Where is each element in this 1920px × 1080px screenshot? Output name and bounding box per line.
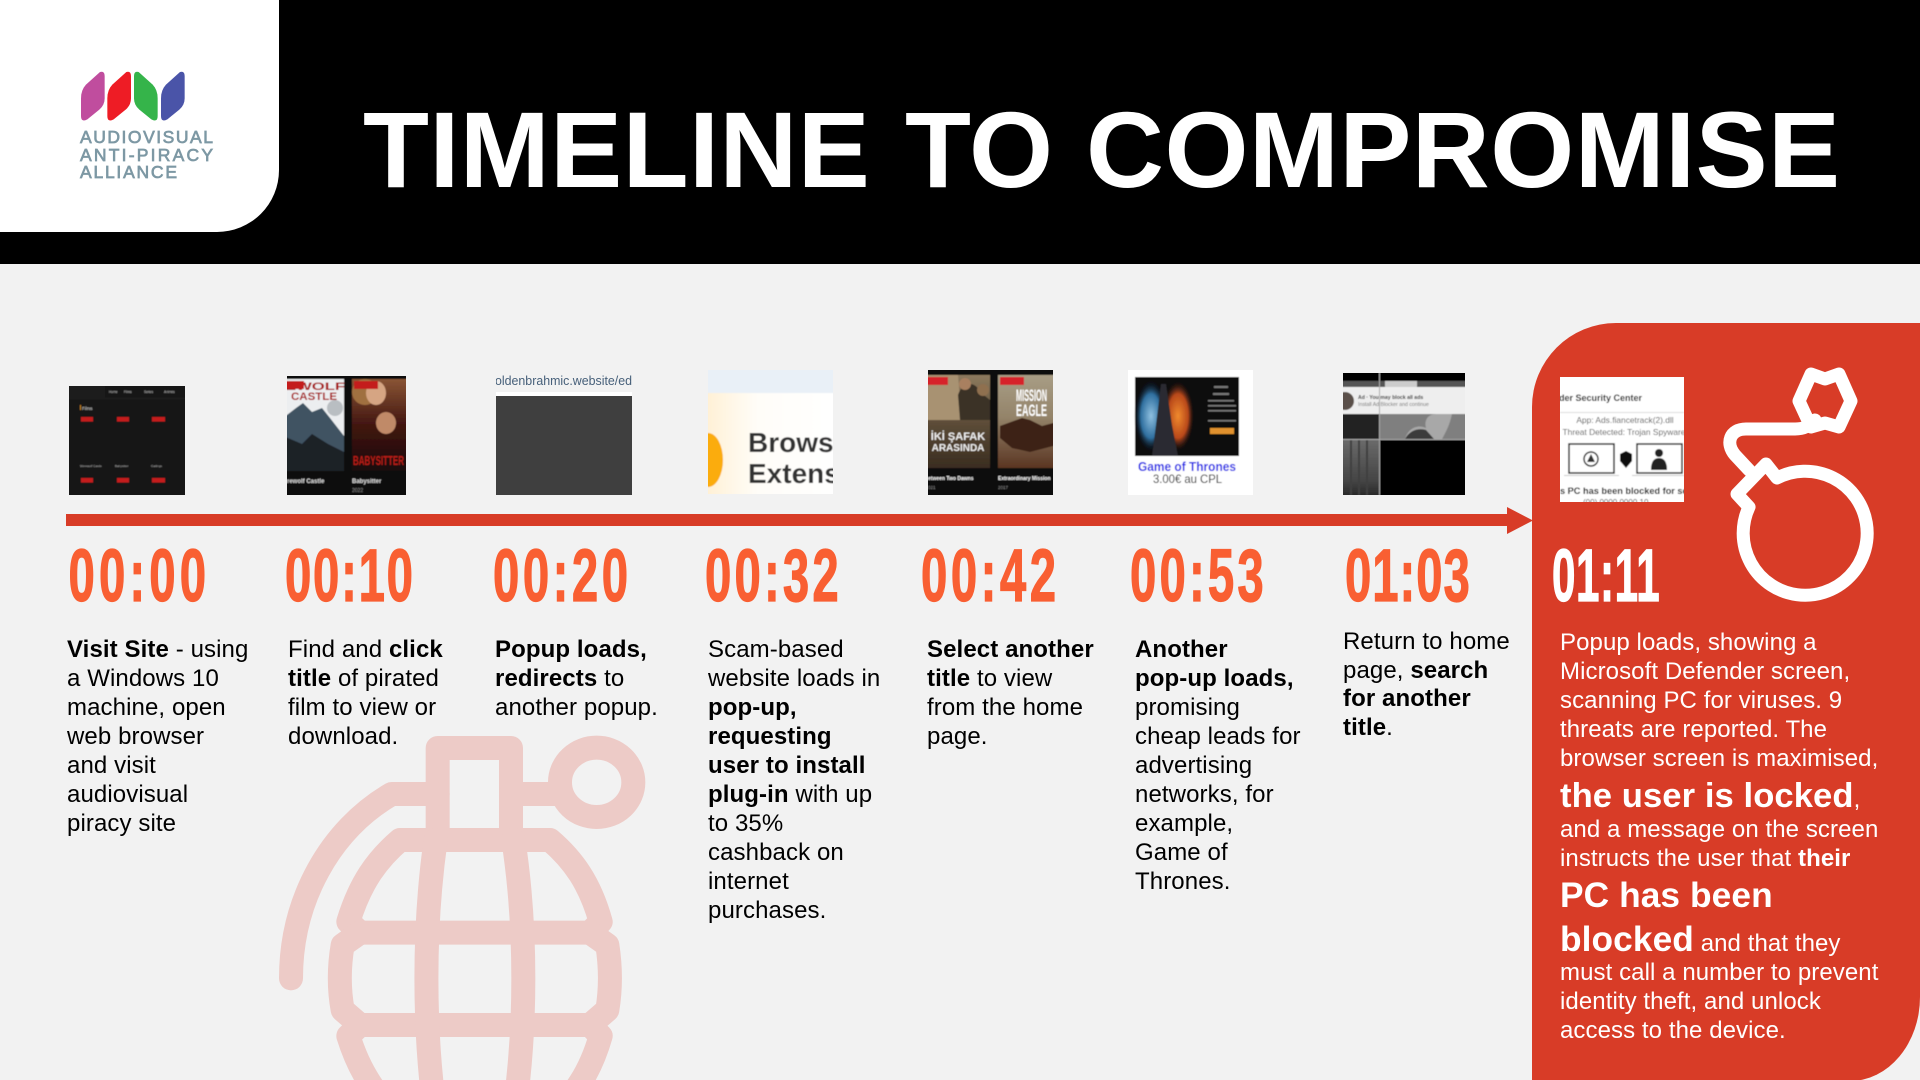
step 6 description: pop-up loads, <box>1135 665 1294 692</box>
logo wordmark: ANTI-PIRACY <box>80 145 213 165</box>
step 3 description: another popup. <box>495 694 658 721</box>
step 4 description: purchases. <box>708 897 826 924</box>
step 4 description: requesting <box>708 723 832 750</box>
step 3 description: redirects to <box>495 665 624 692</box>
logo wordmark: ALLIANCE <box>80 162 177 182</box>
step 5 description: page. <box>927 723 988 750</box>
step 8 <box>1552 374 1879 1044</box>
title: TIMELINE <box>363 89 870 210</box>
step 2 description: download. <box>288 723 398 750</box>
thumbnail 5: film posters: ARASINDA <box>932 443 984 454</box>
step 2 <box>285 535 443 750</box>
thumbnail 1: dark site listing: Home <box>109 390 118 394</box>
thumbnail 8: fake defender screen: Threat Detected: Trojan Spyware <box>1563 427 1686 437</box>
step 2 description: Find and click <box>288 636 443 663</box>
step 4 description: plug-in with up <box>708 781 872 808</box>
logo wordmark <box>80 127 213 182</box>
step 8 description: browser screen is maximised, <box>1560 745 1878 772</box>
time: 00:53: 00:53 <box>1130 535 1264 618</box>
step 1 description: and visit <box>67 752 156 779</box>
time: 00:42: 00:42 <box>921 535 1056 618</box>
thumbnail 1: dark site listing: Films <box>124 390 132 394</box>
thumbnail 4: browser extension page: Brows <box>748 427 834 458</box>
step 6 description: example, <box>1135 810 1233 837</box>
time: 01:11: 01:11 <box>1552 533 1660 617</box>
step 8 description: must call a number to prevent <box>1560 959 1879 986</box>
step 5 description: title to view <box>927 665 1052 692</box>
title: COMPROMISE <box>1086 89 1841 210</box>
step 6 description: cheap leads for <box>1135 723 1301 750</box>
step 6 description: promising <box>1135 694 1240 721</box>
thumbnail 1: dark site listing: Babysitter <box>115 464 128 468</box>
thumbnail 2: film posters: EWOLF <box>285 381 345 393</box>
step 7 <box>1343 535 1510 741</box>
time: 00:20: 00:20 <box>493 535 628 618</box>
step 1 description: web browser <box>66 723 204 750</box>
thumbnail 1: dark site listing: Films <box>82 406 93 411</box>
step 4 description: cashback on <box>708 839 844 866</box>
step 8 description: instructs the user that their <box>1560 845 1850 872</box>
icon: logo petals <box>81 72 185 120</box>
time: 00:00: 00:00 <box>68 535 206 618</box>
thumbnail 2: film posters: CASTLE <box>291 391 337 403</box>
time: 00:32: 00:32 <box>705 535 839 618</box>
step 1 description: piracy site <box>67 810 176 837</box>
step 4 description: pop-up, <box>708 694 797 721</box>
icon: grenade watermark <box>291 748 633 1080</box>
step 8 description: Microsoft Defender screen, <box>1560 658 1850 685</box>
thumbnail 2: film posters <box>285 376 406 495</box>
thumbnail 6: game of thrones ad <box>1128 370 1253 495</box>
step 3 <box>493 535 658 721</box>
step 7 description: . <box>1386 714 1393 741</box>
thumbnail 8: fake defender screen <box>1559 377 1688 507</box>
title: TO <box>905 89 1053 210</box>
step 3 description: Popup loads, <box>495 636 647 663</box>
thumbnail 4: browser extension page: Extens <box>748 458 840 489</box>
step 8 description: and a message on the screen <box>1560 816 1878 843</box>
step 5 description: Select another <box>927 636 1094 663</box>
step 7 description: page, search <box>1343 657 1488 684</box>
step 8 description: blocked and that they <box>1560 920 1841 959</box>
time: 00:10: 00:10 <box>285 535 413 618</box>
thumbnail 6: game of thrones ad: 3.00€ au CPL <box>1153 472 1222 486</box>
icon: bomb <box>1730 374 1867 595</box>
panel: final step background <box>1532 323 1920 1080</box>
thumbnail 4: browser extension page <box>708 370 840 494</box>
step 6 description: Game of <box>1135 839 1228 866</box>
step 6 description: Another <box>1135 636 1228 663</box>
thumbnail 2: film posters: Babysitter <box>352 479 382 485</box>
thumbnail 5: film posters: 021 <box>928 485 936 490</box>
thumbnail 6: game of thrones ad: Game of Thrones <box>1138 459 1236 474</box>
thumbnail 5: film posters: İKİ ŞAFAK <box>931 430 985 443</box>
thumbnail 8: fake defender screen: App: Ads.fiancetrack(2).dll <box>1576 415 1674 425</box>
step 7 description: title <box>1343 714 1386 741</box>
step 5 description: from the home <box>927 694 1083 721</box>
thumbnail 7: ad blocker popup <box>1343 373 1465 495</box>
step 1 description: Visit Site - using <box>67 636 248 663</box>
step 1 <box>66 535 248 837</box>
step 1 description: machine, open <box>67 694 226 721</box>
header band <box>0 0 1920 264</box>
step 5 <box>921 535 1094 750</box>
thumbnail 1: dark site listing: Werewolf Castle <box>80 464 102 468</box>
thumbnail 3: redirect popup <box>495 373 632 495</box>
logo panel <box>0 0 279 232</box>
step 4 description: internet <box>708 868 789 895</box>
thumbnail 2: film posters: 2022 <box>352 488 363 494</box>
step 4 description: to 35% <box>708 810 783 837</box>
step 8 description: scanning PC for viruses. 9 <box>1560 687 1842 714</box>
step 7 description: for another <box>1343 685 1471 712</box>
thumbnail 1: dark site listing: Series <box>144 390 153 394</box>
thumbnail 1: dark site listing: Animés <box>164 390 175 394</box>
step 8 description: threats are reported. The <box>1560 716 1827 743</box>
thumbnail 7: ad blocker popup: Ad · You may block all ads <box>1358 395 1423 401</box>
step 6 <box>1130 535 1301 895</box>
thumbnail 1: dark site listing: Gatlings <box>151 464 163 468</box>
thumbnail 5: film posters: 2017 <box>998 485 1009 490</box>
step 4 description: website loads in <box>707 665 880 692</box>
thumbnail 8: fake defender screen: (00) 0000 0000 10 <box>1583 498 1649 507</box>
step 4 description: user to install <box>708 752 866 779</box>
step 4 description: Scam-based <box>708 636 844 663</box>
arrow: timeline <box>66 507 1533 534</box>
step 2 description: film to view or <box>288 694 436 721</box>
thumbnail 5: film posters <box>928 370 1053 495</box>
step 8 description: access to the device. <box>1560 1017 1786 1044</box>
thumbnail 5: film posters: Extraordinary Mission <box>998 476 1051 482</box>
step 4 <box>705 535 880 924</box>
step 8 description: PC has been <box>1560 876 1773 915</box>
step 1 description: audiovisual <box>67 781 188 808</box>
step 2 description: title of pirated <box>288 665 439 692</box>
thumbnail 5: film posters: etween Two Dawns <box>928 476 974 482</box>
step 8 description: the user is locked, <box>1560 777 1860 815</box>
step 6 description: advertising <box>1135 752 1252 779</box>
step 6 description: Thrones. <box>1135 868 1231 895</box>
step 6 description: networks, for <box>1135 781 1274 808</box>
logo wordmark: AUDIOVISUAL <box>80 127 213 147</box>
step 7 description: Return to home <box>1343 628 1510 655</box>
step 8 description: Popup loads, showing a <box>1560 629 1817 656</box>
step 1 description: a Windows 10 <box>67 665 219 692</box>
thumbnail 8: fake defender screen: der Security Center <box>1559 393 1643 403</box>
thumbnail 2: film posters: rewolf Castle <box>287 479 325 485</box>
thumbnail 1: dark site listing <box>69 386 185 495</box>
time: 01:03: 01:03 <box>1345 535 1470 618</box>
step 8 description: identity theft, and unlock <box>1560 988 1822 1015</box>
thumbnail 8: fake defender screen: s PC has been blocked for se <box>1560 486 1688 496</box>
thumbnail 7: ad blocker popup: Install Ad Blocker and continue <box>1358 402 1429 408</box>
